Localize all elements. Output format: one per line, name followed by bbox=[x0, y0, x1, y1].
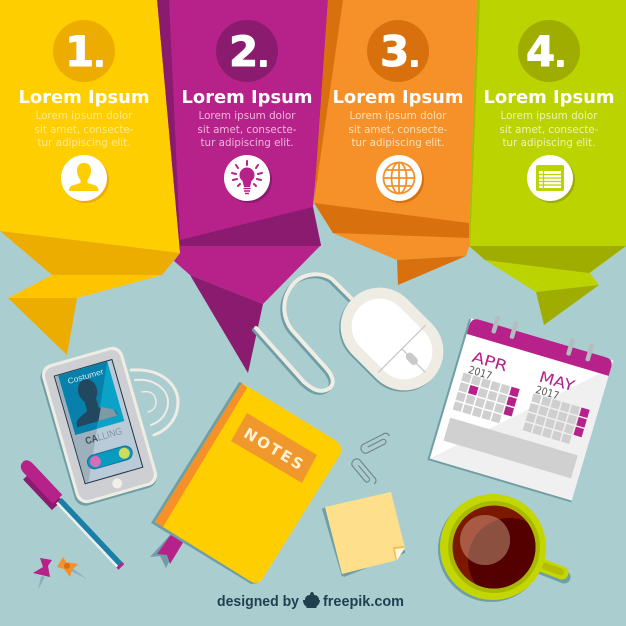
notebook bbox=[150, 382, 341, 584]
text block 4: tur adipiscing elit. bbox=[502, 137, 596, 149]
month: April: APR bbox=[470, 348, 510, 375]
icon: globe bbox=[376, 155, 424, 203]
phone screen: CALLING bbox=[84, 426, 124, 447]
month: April: 2017 bbox=[467, 364, 493, 382]
number badge 4 bbox=[518, 20, 580, 82]
footer credit: designed by bbox=[217, 594, 299, 610]
month: April bbox=[453, 347, 527, 426]
number badge 2 bbox=[216, 20, 278, 82]
sticky note bbox=[322, 492, 405, 577]
text block 2: Lorem ipsum dolor bbox=[198, 110, 296, 122]
text block 4: sit amet, consecte- bbox=[500, 124, 599, 136]
text block 1: Lorem ipsum dolor bbox=[36, 110, 133, 122]
panel: banner 3 orange bbox=[314, 0, 477, 285]
text block 4: Lorem ipsum dolor bbox=[500, 110, 598, 122]
phone screen: Costumer bbox=[67, 367, 105, 386]
footer credit: freepik.com bbox=[323, 594, 404, 610]
phone screen bbox=[54, 359, 143, 484]
number badge 3: 3. bbox=[380, 27, 420, 76]
icon: push pins bbox=[33, 557, 87, 590]
icon: person bbox=[61, 155, 109, 203]
number badge 4: 4. bbox=[526, 27, 566, 76]
text block 4 bbox=[500, 110, 599, 149]
text block 3: sit amet, consecte- bbox=[348, 124, 448, 136]
notes label: NOTES bbox=[241, 424, 306, 474]
text block 1 bbox=[34, 110, 134, 149]
number badge 3 bbox=[367, 20, 429, 82]
panel: banner 4 green bbox=[469, 0, 626, 325]
text block 3: tur adipiscing elit. bbox=[352, 137, 444, 149]
text block 2: sit amet, consecte- bbox=[198, 124, 297, 136]
calendar rings bbox=[491, 315, 594, 362]
mouse cable bbox=[254, 274, 352, 393]
text block 1: tur adipiscing elit. bbox=[38, 137, 130, 149]
phone bbox=[37, 344, 160, 508]
panel: banner 2 magenta bbox=[157, 0, 332, 373]
signal waves bbox=[131, 370, 178, 435]
calendar header bbox=[467, 318, 613, 376]
heading 2: Lorem Ipsum bbox=[182, 88, 312, 108]
icon: light bulb bbox=[224, 155, 272, 203]
paper clips bbox=[350, 432, 392, 487]
coffee cup bbox=[438, 494, 564, 602]
text block 2: tur adipiscing elit. bbox=[200, 137, 294, 149]
text block 2 bbox=[198, 110, 297, 149]
footer credit bbox=[217, 592, 404, 610]
month: May: 2017 bbox=[534, 384, 560, 402]
caller silhouette bbox=[65, 373, 118, 427]
number badge 2: 2. bbox=[229, 27, 268, 76]
text block 3 bbox=[348, 110, 448, 149]
heading 3: Lorem Ipsum bbox=[332, 88, 464, 108]
number badge 1 bbox=[53, 20, 115, 82]
panel: banner 1 yellow bbox=[0, 0, 180, 355]
heading 1: Lorem Ipsum bbox=[18, 88, 150, 108]
number badge 1: 1. bbox=[65, 27, 104, 76]
calendar bbox=[427, 308, 616, 502]
month: May: MAY bbox=[537, 368, 578, 395]
notes label bbox=[231, 413, 317, 483]
mouse bbox=[323, 271, 460, 408]
text block 1: sit amet, consecte- bbox=[34, 124, 134, 136]
text block 3: Lorem ipsum dolor bbox=[350, 110, 447, 122]
pen bbox=[14, 458, 126, 575]
cup handle bbox=[541, 565, 564, 577]
bookmark bbox=[150, 533, 184, 568]
heading 4: Lorem Ipsum bbox=[484, 88, 614, 108]
icon: table bbox=[527, 155, 575, 203]
month: May bbox=[523, 367, 597, 447]
